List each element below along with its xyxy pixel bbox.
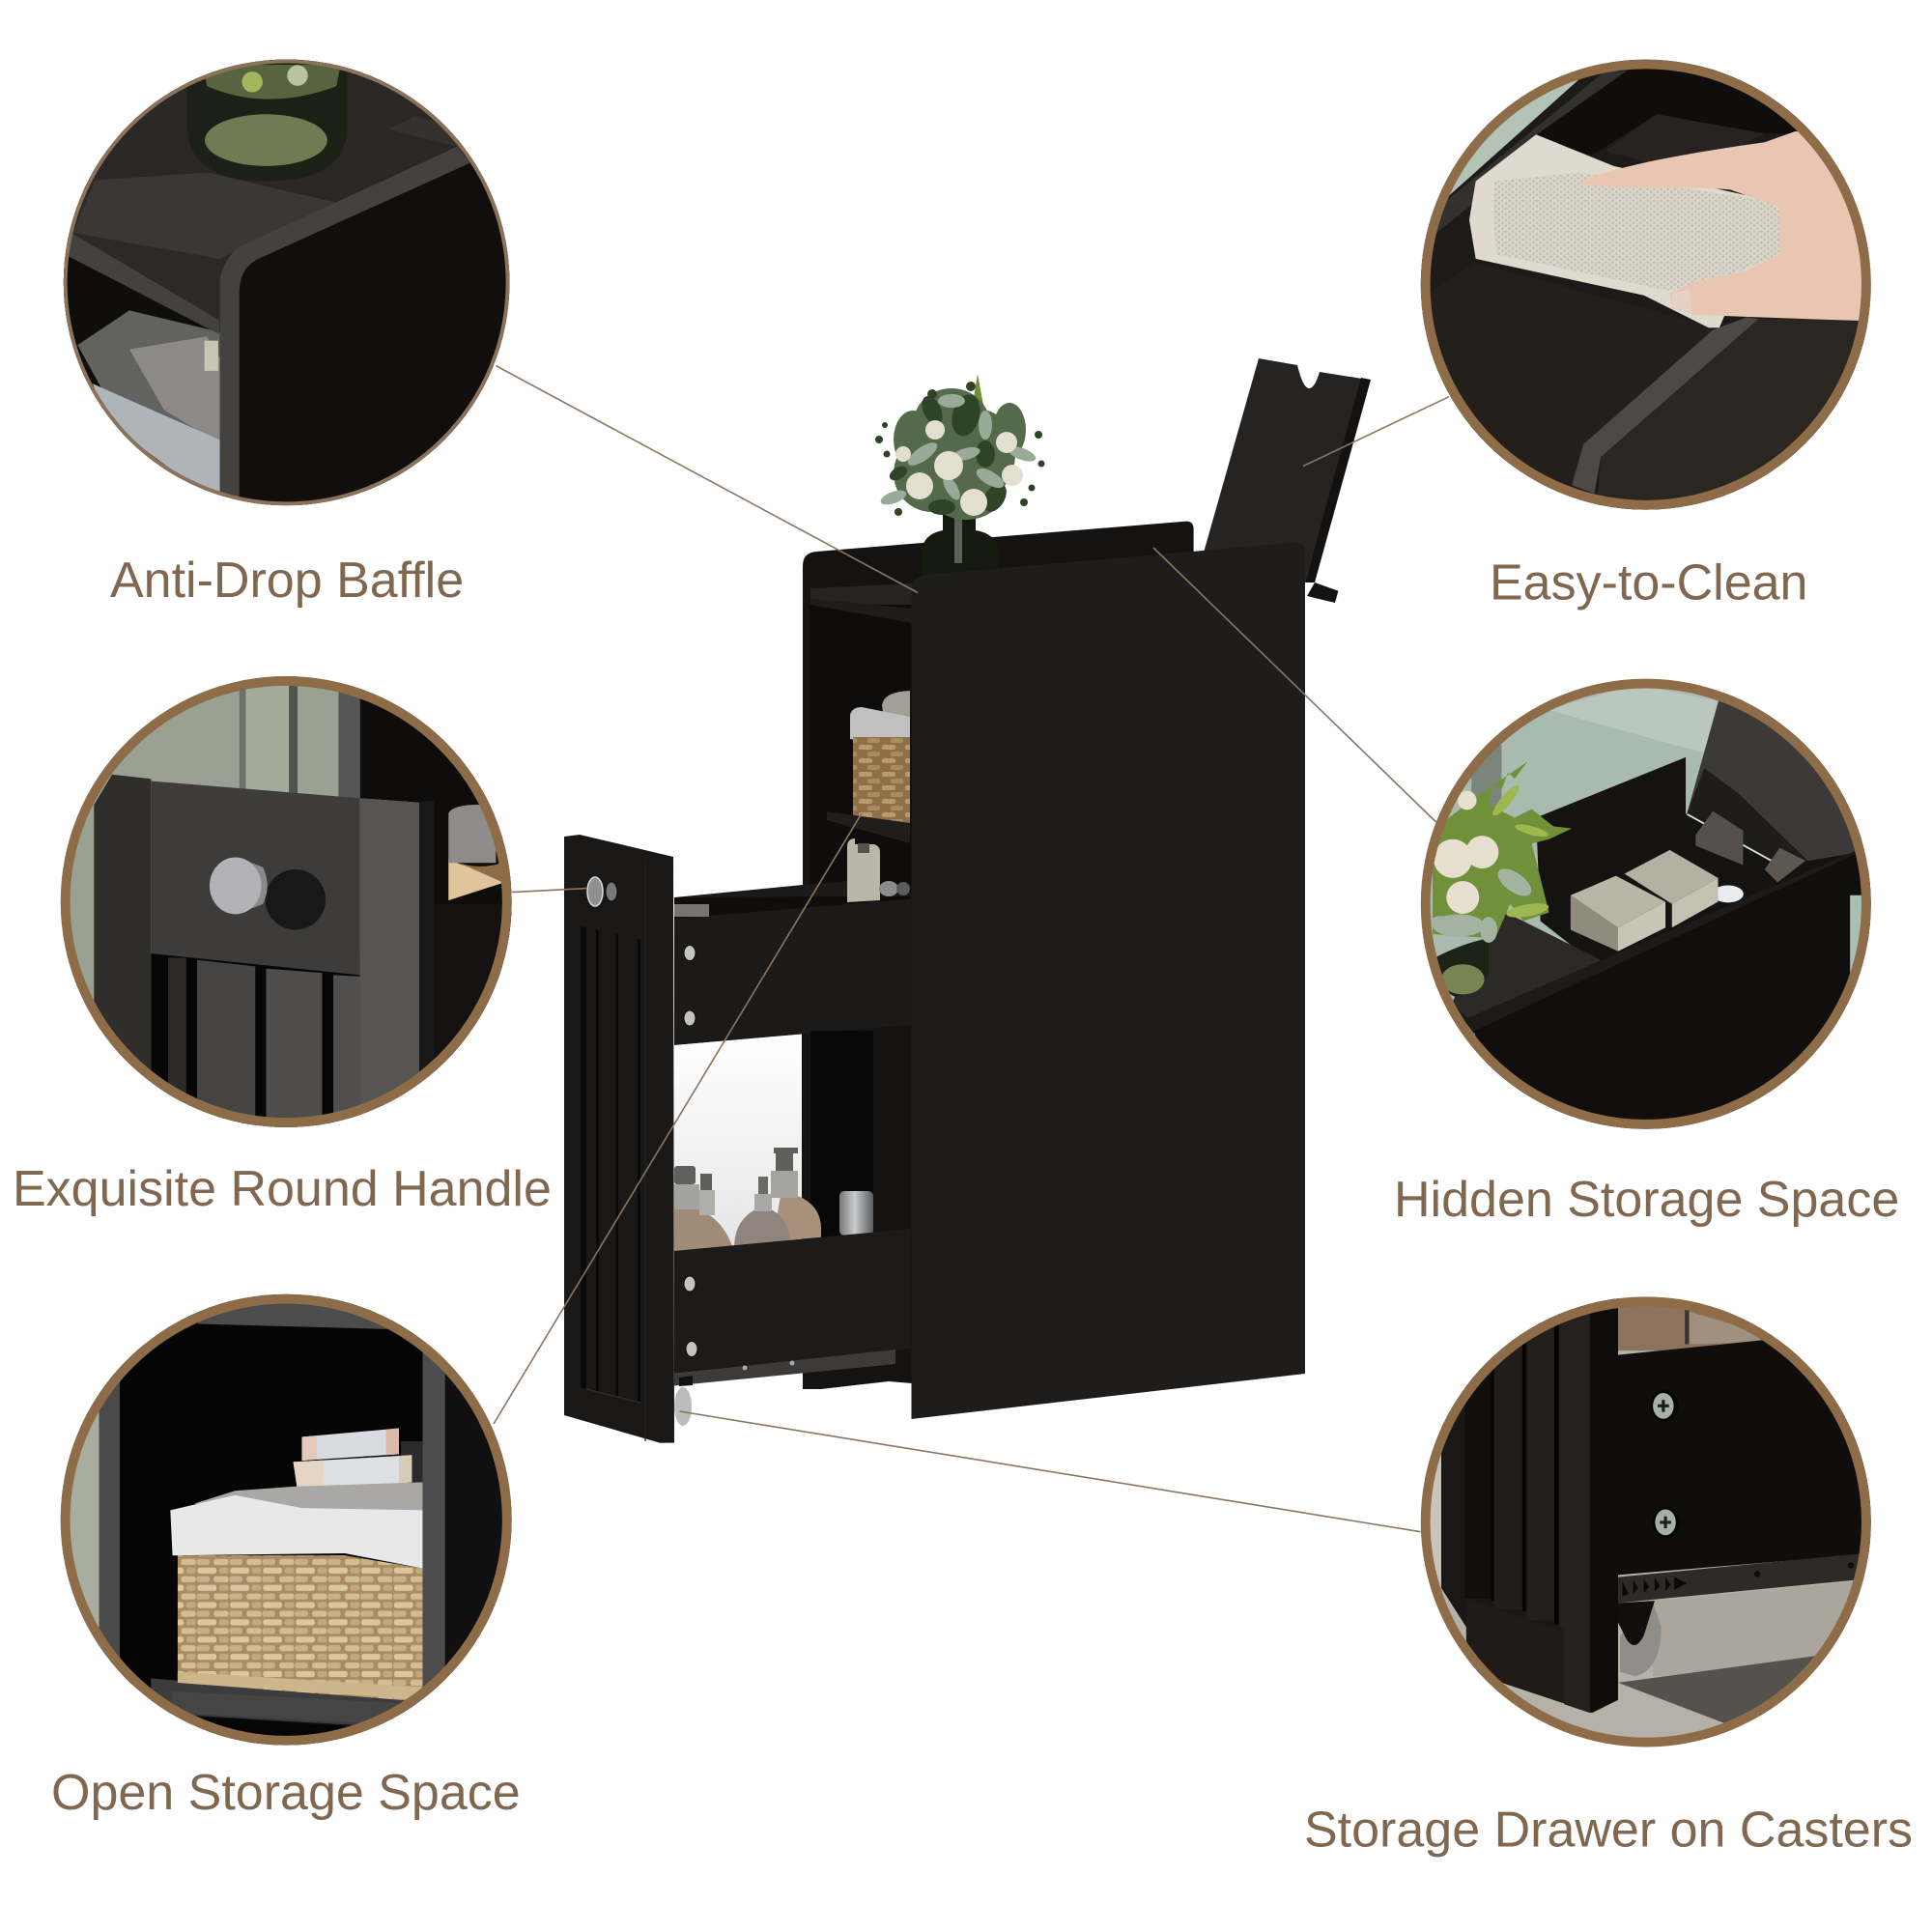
drawer front door panel with grooves xyxy=(564,835,674,1443)
caption: Easy-to-Clean: Easy-to-Clean xyxy=(1490,554,1807,611)
detail circle: open shelf and basket xyxy=(56,1291,518,1751)
drawer mid gap, reflective backdrop xyxy=(674,1026,911,1248)
tilted lid flap xyxy=(1204,358,1371,603)
drawer knob xyxy=(587,877,617,906)
drawer screws xyxy=(684,945,697,1356)
line: round handle xyxy=(512,889,587,893)
feature: hidden storage space xyxy=(1394,675,1899,1228)
flower bouquet in glass vase xyxy=(875,374,1045,577)
cabinet body and back baffle xyxy=(803,522,1194,1389)
caption: Anti-Drop Baffle: Anti-Drop Baffle xyxy=(110,553,464,609)
leader lines xyxy=(494,366,1449,1532)
drawer bottles xyxy=(674,1148,873,1252)
line: casters xyxy=(680,1411,1420,1532)
line: anti-drop baffle xyxy=(496,366,918,593)
line: open storage xyxy=(494,813,862,1424)
feature: easy to clean xyxy=(1415,56,1877,611)
caption: Open Storage Space: Open Storage Space xyxy=(51,1765,521,1821)
feature: open storage space xyxy=(51,1291,521,1821)
feature: exquisite round handle xyxy=(13,671,552,1217)
caption: Storage Drawer on Casters: Storage Drawer on Casters xyxy=(1304,1803,1913,1859)
line: hidden storage xyxy=(1153,548,1436,822)
main side panel xyxy=(912,543,1305,1419)
product: slim black cabinet with open drawer xyxy=(564,358,1371,1443)
detail circle: caster close-up xyxy=(1415,1294,1877,1751)
detail circle: knob close-up xyxy=(56,671,518,1135)
detail circle: hidden compartment xyxy=(1415,675,1877,1137)
detail circle: baffle close-up xyxy=(60,56,518,509)
caption: Exquisite Round Handle: Exquisite Round Handle xyxy=(13,1161,552,1217)
open shelf with basket and towels xyxy=(827,691,910,843)
feature: anti-drop baffle xyxy=(60,56,518,609)
feature: storage drawer on casters xyxy=(1304,1294,1913,1859)
line: easy to clean xyxy=(1303,397,1449,466)
caption: Hidden Storage Space: Hidden Storage Space xyxy=(1394,1172,1899,1228)
drawer lower section xyxy=(674,1229,911,1426)
drawer upper section xyxy=(674,838,911,1045)
detail circle: wiping with cloth xyxy=(1415,56,1877,513)
